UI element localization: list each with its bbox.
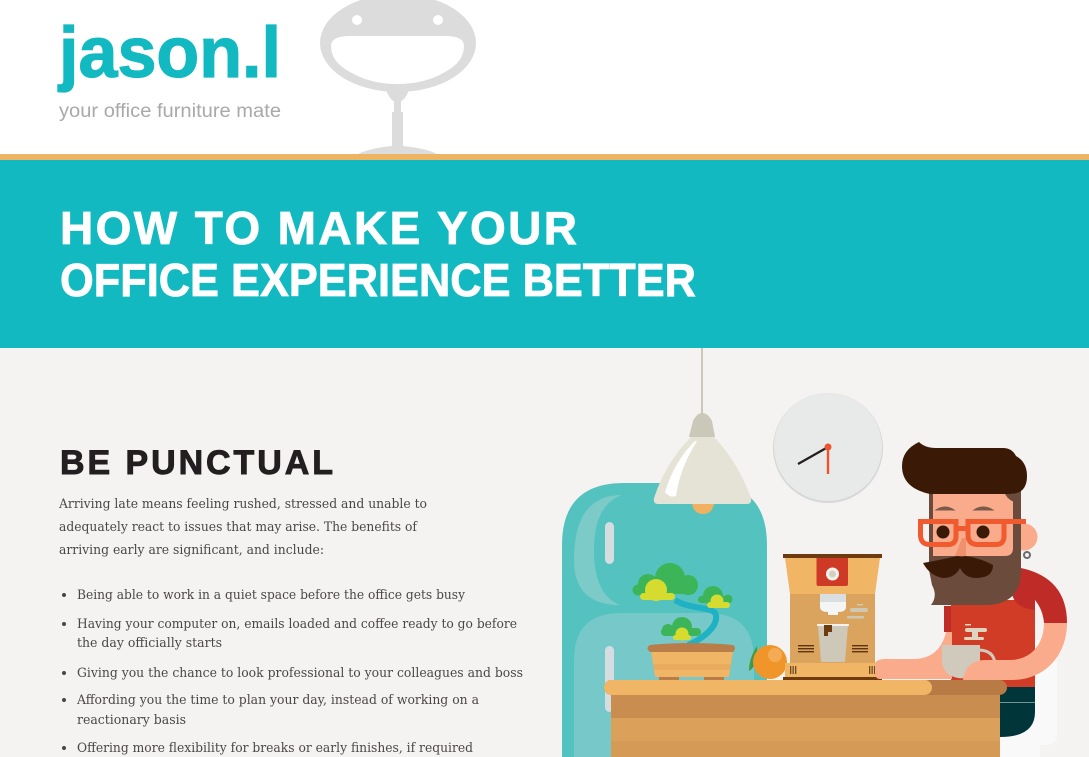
illustration: man drinking coffee [875, 442, 1067, 757]
intro paragraph: arriving early are significant, and include: [59, 543, 324, 558]
ear [1010, 524, 1038, 550]
glasses [920, 522, 1026, 544]
sleeve [1012, 568, 1067, 623]
shirt logo [964, 624, 987, 640]
torso [951, 600, 1035, 687]
illustration: bonsai plant [632, 563, 735, 681]
bullet list: the day officially starts [77, 636, 222, 651]
bullet list: Affording you the time to plan your day, instead of working on a [76, 693, 479, 708]
illustration: coffee machine [783, 554, 882, 680]
beard [929, 490, 1021, 605]
bullet list: Giving you the chance to look professional to your colleagues and boss [77, 666, 523, 681]
mug handle [978, 650, 995, 664]
intro paragraph [58, 497, 427, 558]
intro paragraph: adequately react to issues that may arise. The benefits of [59, 520, 418, 535]
heading: be punctual: BE PUNCTUAL [60, 444, 333, 482]
face [933, 490, 1013, 556]
near arm [963, 623, 1067, 680]
eyes [936, 526, 950, 538]
moustache [923, 556, 993, 578]
illustration: wall clock [773, 393, 883, 503]
logo: jason.l [57, 14, 281, 93]
illustration: desk [604, 680, 1007, 757]
title [60, 202, 696, 306]
bullet list [62, 588, 523, 756]
bullet list: Offering more flexibility for breaks or early finishes, if required [77, 741, 473, 756]
title banner [0, 154, 1089, 348]
title: OFFICE EXPERIENCE BETTER [60, 254, 696, 306]
illustration: pendant lamp [654, 348, 751, 514]
illustration: fridge [562, 483, 767, 757]
hair [902, 442, 1027, 494]
intro paragraph: Arriving late means feeling rushed, stressed and unable to [58, 497, 427, 512]
bullet list: Having your computer on, emails loaded and coffee ready to go before [77, 617, 517, 632]
icon: grey chair [320, 0, 476, 154]
bullet list: reactionary basis [77, 713, 186, 728]
trousers [1000, 685, 1035, 737]
earring [1024, 552, 1030, 558]
tagline: your office furniture mate [59, 101, 281, 122]
title: HOW TO MAKE YOUR [60, 202, 577, 254]
mug [942, 645, 980, 678]
eyebrows [936, 507, 954, 510]
office chair [1000, 640, 1057, 757]
bullet list: Being able to work in a quiet space before the office gets busy [77, 588, 466, 603]
illustration: orange [749, 645, 787, 679]
far arm [875, 632, 952, 679]
